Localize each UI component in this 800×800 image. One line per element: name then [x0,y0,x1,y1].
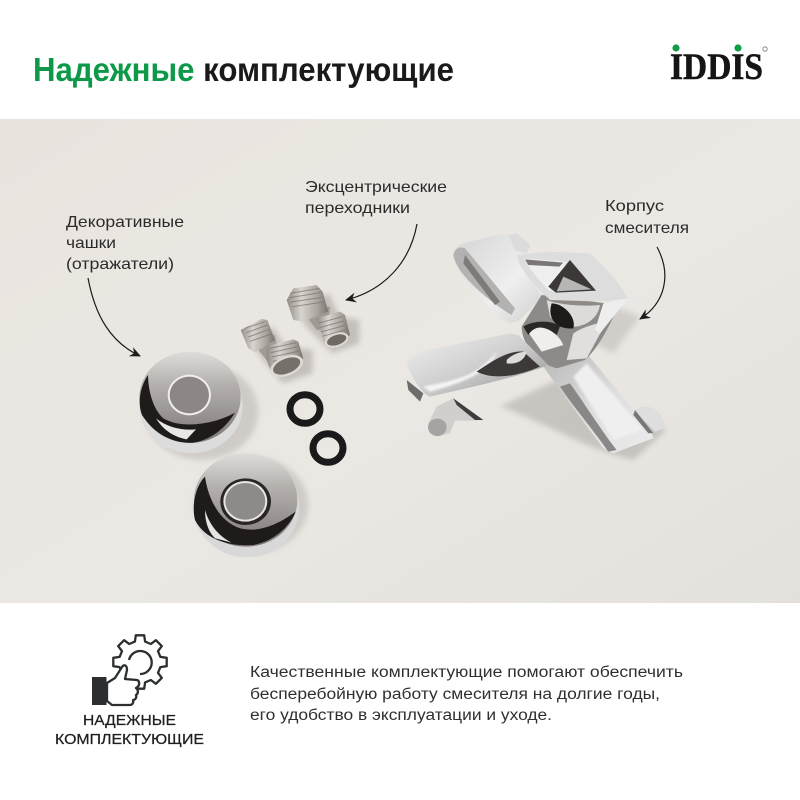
logo: IDDIS: IDDIS [670,47,763,88]
description text: Качественные комплектующие помогают обеспечить [250,664,683,681]
faucet lever [517,252,628,333]
description text: бесперебойную работу смесителя на долгие годы, [250,686,660,703]
faucet rear plate [453,233,542,323]
faucet lower body [543,353,665,453]
faucet shower outlet [407,380,483,437]
adapter 1 [241,319,306,381]
faucet central body [522,295,618,368]
photo: faucet body [407,233,667,460]
adapter 2 [287,285,351,350]
faucet spout [407,333,548,397]
photo panel: faucet parts [0,119,800,603]
description text [250,664,683,724]
photo: decorative cup 2 [194,453,308,557]
label: decorative cups: (отражатели) [66,256,174,273]
thumb [107,665,139,705]
label: faucet body [605,198,689,237]
label: decorative cups [66,214,184,273]
label: faucet body: смесителя [605,220,689,237]
header background [0,0,800,119]
icon caption: КОМПЛЕКТУЮЩИЕ [55,732,204,748]
icon caption [55,713,204,748]
label: eccentric adapters: переходники [305,200,410,217]
label: faucet body: Корпус [605,198,664,215]
cuff [92,677,106,705]
arrow: decorative cups [88,278,140,356]
photo: rubber gaskets [290,395,343,462]
description text: его удобство в эксплуатации и уходе. [250,707,552,724]
gear [113,635,167,689]
icon caption: НАДЕЖНЫЕ [83,713,176,729]
label: decorative cups: чашки [66,235,116,252]
icon: gear and thumbs up [92,635,167,705]
arrow: adapters [346,224,417,300]
arrow: faucet body [640,247,665,319]
title: Надежные комплектующие [33,51,454,88]
label: eccentric adapters: Эксцентрические [305,179,447,196]
label: decorative cups: Декоративные [66,214,184,231]
photo: eccentric adapters [241,285,359,383]
photo: decorative cup 1 [139,352,258,460]
label: eccentric adapters [305,179,447,217]
